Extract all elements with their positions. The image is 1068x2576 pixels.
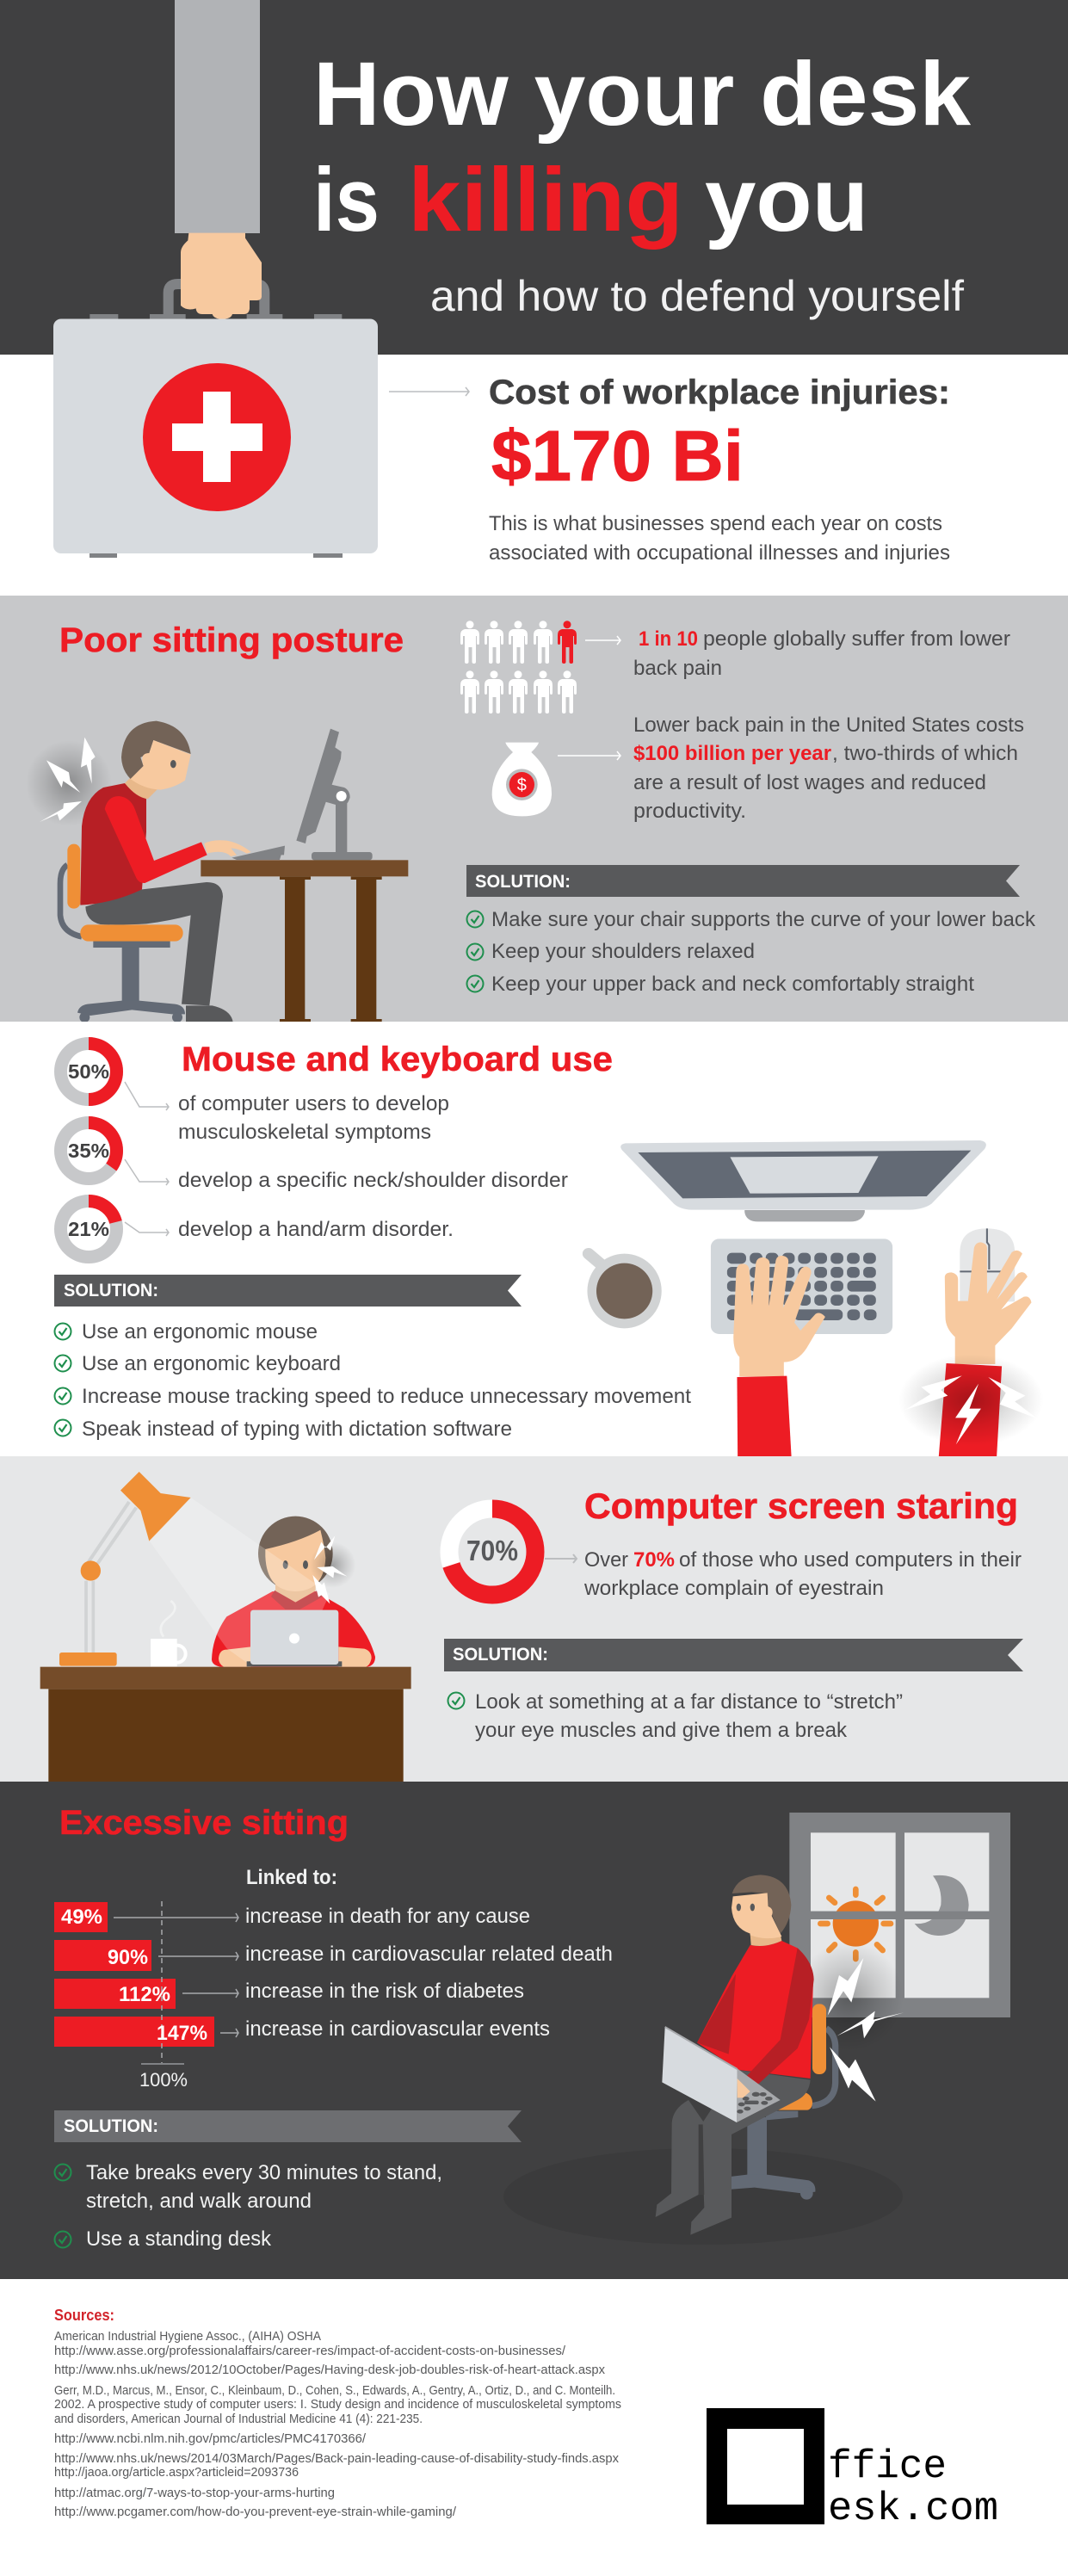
solution list: Speak instead of typing with dictation software [82, 1418, 512, 1441]
sources list: American Industrial Hygiene Assoc., (AIHA) OSHA [54, 2330, 321, 2344]
panel: header band [0, 0, 1068, 355]
donut chart: 70% [449, 1509, 535, 1595]
stat: 1 in 10: back pain [633, 657, 722, 680]
mouse [960, 1228, 1015, 1301]
illustration: person at desk [26, 721, 408, 1022]
illustration: window and seated person with laptop [656, 1813, 1010, 2235]
bar chart: 100% [139, 2069, 188, 2091]
donut labels: 35% [68, 1140, 109, 1162]
mug with steam [151, 1601, 186, 1666]
logo: ffice [828, 2444, 947, 2489]
stat: cost of back pain: productivity. [633, 800, 746, 823]
illustration: desk seen from above [587, 1140, 1044, 1456]
stat text [583, 1548, 1022, 1600]
light beam [149, 1498, 330, 1667]
solution banner: SOLUTION: [475, 872, 571, 892]
people icons: 1 in 10 [460, 621, 577, 713]
icon: money bag: $ [517, 776, 527, 795]
solution banner [444, 1639, 1023, 1671]
sources list: http://www.nhs.uk/news/2012/10October/Pages/Having-desk-job-doubles-risk-of-heart-attack.aspx [54, 2363, 606, 2377]
stat: cost of back pain: , two-thirds of which [832, 742, 1018, 765]
panel: mouse and keyboard use [0, 1022, 1068, 1456]
stats text: musculoskeletal symptoms [178, 1121, 431, 1144]
desk lamp [59, 1472, 191, 1666]
arrow [585, 636, 620, 645]
stat text: Over [584, 1548, 628, 1572]
donut labels [68, 1060, 109, 1240]
solution banner: SOLUTION: [64, 1281, 158, 1300]
solution list: Use a standing desk [86, 2227, 272, 2251]
panel: excessive sitting [0, 1782, 1068, 2279]
solution list: your eye muscles and give them a break [475, 1719, 848, 1742]
sources list: and disorders, American Journal of Industrial Medicine 41 (4): 221-235. [54, 2412, 423, 2426]
heading: Poor sitting posture [59, 621, 404, 659]
sources heading: Sources: [54, 2307, 114, 2324]
title: is [313, 150, 380, 250]
stat: cost of back pain: $100 billion per year [633, 742, 831, 765]
solution list: Use an ergonomic mouse [82, 1320, 318, 1344]
linked conditions text: increase in the risk of diabetes [245, 1980, 524, 2003]
floor shadow [503, 2148, 903, 2245]
solution banner [54, 2110, 522, 2142]
title: How your desk [313, 44, 972, 145]
sources list: http://atmac.org/7-ways-to-stop-your-arms-hurting [54, 2486, 335, 2500]
title: you [705, 150, 868, 250]
panel: cost section background [0, 355, 1068, 596]
right hand with wrist pain [898, 1242, 1044, 1456]
stats text: develop a specific neck/shoulder disorder [178, 1169, 568, 1192]
solution banner [54, 1275, 522, 1307]
arrow [389, 387, 469, 396]
sources list: http://jaoa.org/article.aspx?articleid=2093736 [54, 2466, 299, 2480]
linked conditions text [245, 1905, 613, 2041]
sources list: Gerr, M.D., Marcus, M., Ensor, C., Kleinbaum, D., Cohen, S., Edwards, A., Gentry, A., Ortiz, D., and C. Monteilh. [54, 2384, 615, 2398]
solution list [55, 1320, 691, 1441]
linked to label: Linked to: [246, 1866, 337, 1889]
icon: money bag [492, 743, 552, 816]
donut label: 70% [466, 1535, 518, 1566]
solution list: Keep your upper back and neck comfortably straight [491, 973, 974, 996]
sources list: http://www.asse.org/professionalaffairs/career-res/impact-of-accident-costs-on-businesses/ [54, 2344, 566, 2358]
red cross badge [143, 363, 291, 511]
solution list [55, 2161, 442, 2251]
stat: cost of back pain [633, 713, 1024, 823]
arrow [545, 1554, 577, 1563]
sleeve [175, 0, 260, 233]
case body [53, 318, 378, 553]
stat text: of those who used computers in their [679, 1548, 1022, 1572]
heading: Computer screen staring [584, 1486, 1018, 1526]
cost block: This is what businesses spend each year on costs [489, 512, 942, 535]
linked conditions text: increase in cardiovascular events [245, 2017, 550, 2041]
white cross [172, 392, 262, 482]
bar chart: 90% [108, 1946, 148, 1969]
sources list [54, 2330, 621, 2519]
logo [707, 2408, 998, 2531]
panel: poor sitting posture [0, 596, 1068, 1022]
panel: computer screen staring [0, 1456, 1068, 1782]
laptop [247, 1610, 342, 1666]
solution banner [466, 865, 1020, 897]
solution list: Use an ergonomic keyboard [82, 1352, 341, 1375]
solution list [448, 1690, 903, 1742]
stat: cost of back pain: Lower back pain in the United States costs [633, 713, 1024, 737]
solution banner: SOLUTION: [453, 1645, 548, 1665]
cost block: $170 Bi [491, 416, 744, 496]
coffee cup [587, 1254, 662, 1328]
stats text [178, 1092, 568, 1241]
cost block: associated with occupational illnesses and injuries [489, 541, 950, 565]
sources list: 2002. A prospective study of computer users: I. Study design and incidence of musculoskeletal symptoms [54, 2398, 621, 2412]
linked conditions text: increase in cardiovascular related death [245, 1943, 613, 1966]
linked conditions text: increase in death for any cause [245, 1905, 530, 1928]
stat: 1 in 10: 1 in 10 [639, 627, 698, 651]
title: killing [408, 150, 683, 250]
subtitle: and how to defend yourself [430, 272, 964, 320]
left hand [733, 1256, 825, 1456]
solution list: Look at something at a far distance to “stretch” [475, 1690, 903, 1714]
bar chart: 49% [61, 1906, 102, 1929]
sources list: http://www.pcgamer.com/how-do-you-prevent-eye-strain-while-gaming/ [54, 2505, 457, 2519]
case feet [90, 553, 343, 558]
cost block [489, 374, 950, 565]
solution list: Keep your shoulders relaxed [491, 940, 755, 963]
sources list: http://www.ncbi.nlm.nih.gov/pmc/articles/PMC4170366/ [54, 2432, 367, 2446]
arrow [558, 751, 620, 760]
heading: Excessive sitting [59, 1804, 349, 1842]
connector arrows [125, 1082, 169, 1236]
stat: 1 in 10 [633, 627, 1010, 680]
bar chart [54, 1901, 214, 2091]
stat: 1 in 10: people globally suffer from lower [703, 627, 1010, 651]
bar chart: 147% [157, 2022, 207, 2045]
bar chart: 112% [119, 1983, 170, 2006]
solution list [466, 908, 1036, 996]
stat text: workplace complain of eyestrain [583, 1577, 884, 1600]
cost block: Cost of workplace injuries: [489, 374, 950, 411]
person [212, 1517, 375, 1667]
solution list: Increase mouse tracking speed to reduce unnecessary movement [82, 1385, 691, 1408]
donut labels: 21% [68, 1218, 109, 1240]
title [313, 44, 972, 250]
stat text: 70% [633, 1548, 675, 1572]
solution list: Take breaks every 30 minutes to stand, [86, 2161, 442, 2184]
illustration: lamp, person and desk [40, 1472, 411, 1782]
stats text: develop a hand/arm disorder. [178, 1218, 454, 1241]
panel: sources [0, 2279, 1068, 2576]
stat: cost of back pain: are a result of lost wages and reduced [633, 771, 986, 794]
solution banner: SOLUTION: [64, 2116, 158, 2136]
illustration: arm holding first aid case [53, 0, 378, 558]
monitor [620, 1140, 986, 1221]
solution list: Make sure your chair supports the curve of your lower back [491, 908, 1036, 931]
donut charts [60, 1043, 117, 1257]
desk [40, 1667, 411, 1782]
keyboard [711, 1239, 892, 1334]
case details zoomed group [90, 233, 342, 319]
solution list: stretch, and walk around [86, 2190, 312, 2213]
stats text: of computer users to develop [178, 1092, 449, 1115]
heading: Mouse and keyboard use [182, 1041, 613, 1078]
arrows [114, 1913, 238, 2037]
logo: esk.com [828, 2486, 998, 2531]
donut labels: 50% [68, 1060, 109, 1083]
sources list: http://www.nhs.uk/news/2014/03March/Pages/Back-pain-leading-cause-of-disability-study-finds.aspx [54, 2452, 620, 2466]
